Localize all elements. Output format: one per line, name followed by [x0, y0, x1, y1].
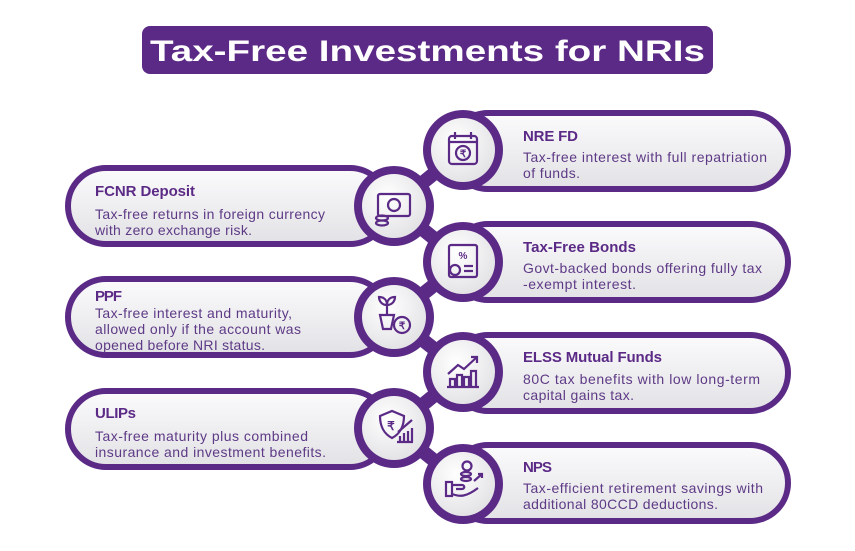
panel: Tax-Free Bonds: Tax-Free Bonds: [523, 239, 636, 256]
icon: plant pot rupee: [354, 277, 434, 357]
panel: PPF: allowed only if the account was: [95, 321, 301, 337]
panel: ULIPs: insurance and investment benefits.: [95, 444, 326, 460]
panel: NPS: NPS: [523, 459, 552, 476]
panel: ELSS Mutual Funds: 80C tax benefits with low long-term: [523, 371, 760, 387]
icon: shield rupee chart: ₹: [387, 419, 395, 433]
icon: hand coins: [423, 444, 503, 524]
panel: Tax-Free Bonds: -exempt interest.: [523, 276, 636, 292]
panel: NRE FD: NRE FD: [523, 128, 578, 145]
icon: plant pot rupee: ₹: [399, 321, 406, 332]
icon: growth chart: [423, 332, 503, 412]
icon: currency notes globe: [354, 166, 434, 246]
panel: NPS: Tax-efficient retirement savings with: [523, 480, 763, 496]
panel: PPF: [68, 279, 388, 355]
panel: PPF: opened before NRI status.: [95, 337, 265, 353]
panel: ELSS Mutual Funds: [450, 335, 788, 411]
icon: calendar rupee: ₹: [460, 149, 467, 160]
panel: FCNR Deposit: [68, 168, 388, 244]
icon: calendar rupee: [423, 110, 503, 190]
title: Tax-Free Investments for NRIs: [150, 35, 705, 68]
panel: NPS: additional 80CCD deductions.: [523, 496, 718, 512]
panel: ULIPs: [68, 391, 388, 467]
panel: Tax-Free Bonds: Govt-backed bonds offering fully tax: [523, 260, 762, 276]
title: [142, 26, 713, 74]
panel: ULIPs: ULIPs: [95, 405, 136, 422]
panel: NRE FD: [450, 113, 788, 189]
panel: ELSS Mutual Funds: ELSS Mutual Funds: [523, 349, 662, 366]
panel: ELSS Mutual Funds: capital gains tax.: [523, 387, 634, 403]
connector chain: [394, 150, 463, 484]
panel: Tax-Free Bonds: [450, 224, 788, 300]
icon: certificate: [423, 222, 503, 302]
panel: ULIPs: Tax-free maturity plus combined: [95, 428, 308, 444]
icon: certificate: %: [459, 251, 468, 262]
panel: NRE FD: Tax-free interest with full repatriation: [523, 149, 767, 165]
panel: FCNR Deposit: with zero exchange risk.: [94, 222, 252, 238]
panel: PPF: Tax-free interest and maturity,: [95, 305, 292, 321]
icon: shield rupee chart: [354, 388, 434, 468]
panel: FCNR Deposit: Tax-free returns in foreign currency: [95, 206, 325, 222]
panel: NPS: [450, 445, 788, 521]
panel: FCNR Deposit: FCNR Deposit: [95, 183, 195, 200]
panel: NRE FD: of funds.: [523, 165, 580, 181]
panel: PPF: PPF: [95, 288, 122, 305]
